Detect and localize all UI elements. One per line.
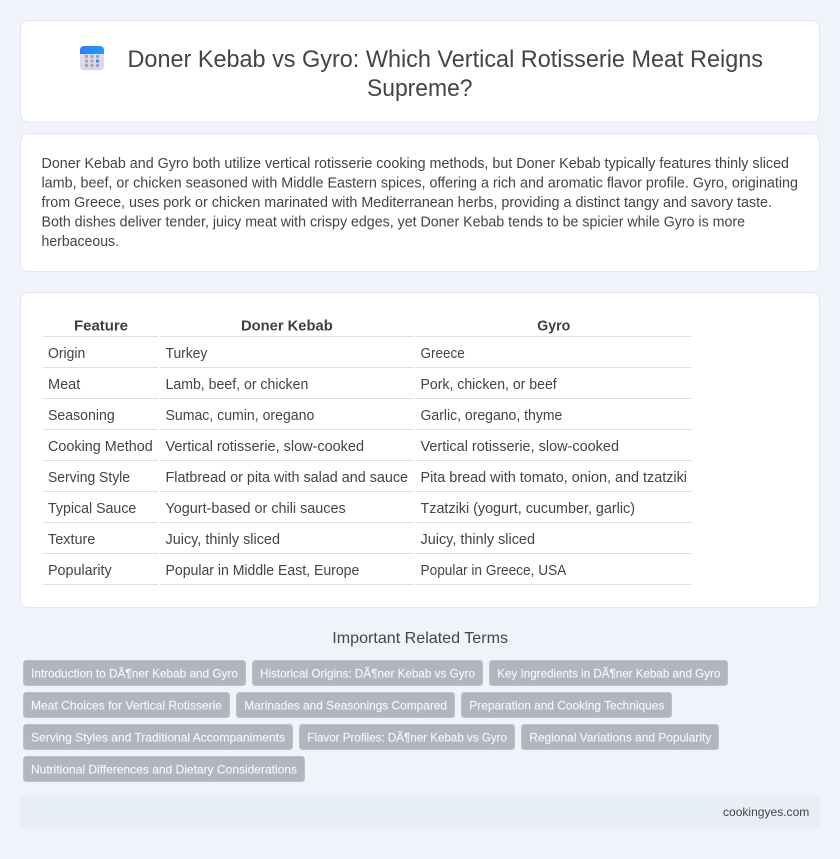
row: typical sauce: Tzatziki (yogurt, cucumber, garlic) <box>420 501 635 517</box>
tag: flavor profiles <box>300 724 514 750</box>
row: seasoning: Garlic, oregano, thyme <box>420 408 562 424</box>
row: origin: Origin <box>48 346 85 362</box>
row: serving style: Flatbread or pita with salad and sauce <box>166 470 408 486</box>
row: meat: Meat <box>48 377 80 393</box>
row: meat: Pork, chicken, or beef <box>420 377 558 393</box>
row: serving style: Serving Style <box>48 470 130 486</box>
title <box>128 46 763 102</box>
row: cooking method <box>43 439 692 460</box>
tag: meat choices: Meat Choices for Vertical Rotisserie <box>31 698 222 712</box>
tag list: related terms <box>24 660 728 782</box>
row: serving style <box>43 470 692 492</box>
tag: historical origins: Historical Origins: DÃ¶ner Kebab vs Gyro <box>260 666 475 680</box>
row: origin: Turkey <box>166 346 208 362</box>
row: seasoning <box>43 408 692 430</box>
panel: comparison table card <box>20 292 820 608</box>
text block: summary paragraph: Doner Kebab and Gyro both utilize vertical rotisserie cooking methods, but Doner Kebab typically features thinly sliced <box>42 156 789 172</box>
tag: key ingredients <box>490 660 728 686</box>
tag: key ingredients: Key Ingredients in DÃ¶ner Kebab and Gyro <box>497 666 721 680</box>
text block: summary paragraph: herbaceous. <box>42 234 119 250</box>
row: meat <box>43 377 692 398</box>
tag: serving styles <box>24 724 292 750</box>
panel: summary card <box>20 134 820 272</box>
tag: serving styles: Serving Styles and Traditional Accompaniments <box>31 730 285 744</box>
footer bar <box>20 795 820 829</box>
row: cooking method: Cooking Method <box>48 439 153 455</box>
tag: preparation: Preparation and Cooking Techniques <box>469 698 664 712</box>
tag: marinades: Marinades and Seasonings Compared <box>244 698 447 712</box>
row: texture: Texture <box>48 532 95 548</box>
tag: flavor profiles: Flavor Profiles: DÃ¶ner Kebab vs Gyro <box>307 730 507 744</box>
table header row <box>43 318 692 336</box>
row: popularity: Popular in Middle East, Europe <box>166 563 359 579</box>
row: origin <box>43 346 692 368</box>
row: typical sauce <box>43 501 692 522</box>
heading: important related terms: Important Related Terms <box>332 630 508 647</box>
tag: introduction <box>24 660 246 686</box>
tag: regional variations: Regional Variations and Popularity <box>529 730 711 744</box>
tag: meat choices <box>24 692 230 718</box>
row: cooking method: Vertical rotisserie, slow-cooked <box>166 439 364 455</box>
icon: calendar <box>80 46 104 70</box>
tag: regional variations <box>522 724 718 750</box>
table: feature comparison <box>43 318 692 584</box>
tag: marinades <box>236 692 454 718</box>
tag: historical origins <box>252 660 482 686</box>
panel: header card <box>20 20 820 122</box>
text block: summary paragraph: from Greece, uses pork or chicken marinated with Mediterranean herbs, providing a distinct tangy and savory taste. <box>42 195 772 211</box>
footer source text: cookingyes.com <box>723 805 809 819</box>
row: seasoning: Seasoning <box>48 408 115 424</box>
tag: nutritional differences <box>24 756 304 782</box>
row: texture <box>43 532 692 554</box>
row: origin: Greece <box>420 346 465 362</box>
table header row: Feature <box>74 318 128 334</box>
row: texture: Juicy, thinly sliced <box>420 532 535 548</box>
tag: preparation <box>462 692 672 718</box>
row: popularity <box>43 563 692 584</box>
table header row: Doner Kebab <box>241 318 333 334</box>
row: popularity: Popularity <box>48 563 112 579</box>
text block: summary paragraph <box>42 156 798 250</box>
row: cooking method: Vertical rotisserie, slow-cooked <box>420 439 619 455</box>
row: popularity: Popular in Greece, USA <box>420 563 567 579</box>
title: Supreme? <box>367 75 472 102</box>
row: meat: Lamb, beef, or chicken <box>166 377 308 393</box>
row: texture: Juicy, thinly sliced <box>166 532 280 548</box>
tag: nutritional differences: Nutritional Differences and Dietary Considerations <box>31 762 297 776</box>
tag: introduction: Introduction to DÃ¶ner Kebab and Gyro <box>31 666 238 680</box>
table header row: Gyro <box>537 318 570 334</box>
text block: summary paragraph: lamb, beef, or chicken seasoned with Middle Eastern spices, offering a rich and aromatic flavor profile. Gyro, originating <box>42 176 798 192</box>
row: serving style: Pita bread with tomato, onion, and tzatziki <box>420 470 687 486</box>
row: typical sauce: Typical Sauce <box>48 501 136 517</box>
text block: summary paragraph: Both dishes deliver tender, juicy meat with crispy edges, yet Doner Kebab tends to be spicier while Gyro is more <box>42 214 745 230</box>
row: typical sauce: Yogurt-based or chili sauces <box>166 501 346 517</box>
row: seasoning: Sumac, cumin, oregano <box>166 408 314 424</box>
title: Doner Kebab vs Gyro: Which Vertical Rotisserie Meat Reigns <box>128 46 763 73</box>
